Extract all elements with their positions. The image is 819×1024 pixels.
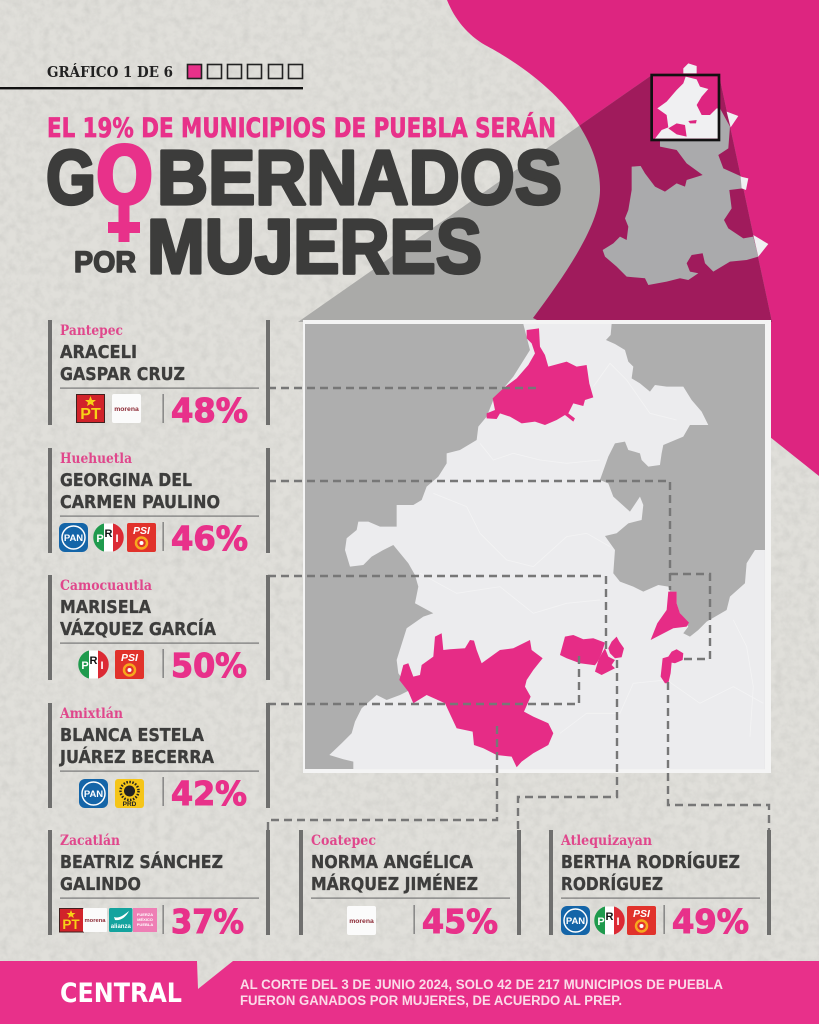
icon: Nueva Alianza logo: alianza bbox=[111, 924, 131, 930]
icon: PRI logo bbox=[78, 650, 109, 678]
icon: morena logo: morena bbox=[85, 918, 106, 924]
icon: PSI logo: PSI bbox=[121, 652, 139, 664]
icon: morena logo bbox=[112, 394, 141, 423]
municipality: Zacatlán bbox=[399, 633, 553, 767]
panel: Camocuautla: 50% bbox=[171, 646, 247, 685]
headline gobernados: BERNADOS bbox=[157, 135, 562, 221]
panel: Camocuautla: MARISELA bbox=[60, 597, 151, 618]
panel: Coatepec: NORMA ANGÉLICA bbox=[311, 851, 473, 873]
icon: PRI logo: P bbox=[81, 660, 89, 672]
municipality: Coatepec bbox=[595, 648, 615, 675]
panel: Pantepec: GASPAR CRUZ bbox=[60, 364, 185, 385]
subtitle: EL 19% DE MUNICIPIOS DE PUEBLA SERÁN bbox=[47, 112, 556, 144]
panel: Pantepec: Pantepec bbox=[60, 323, 123, 339]
panel: Coatepec: MÁRQUEZ JIMÉNEZ bbox=[311, 873, 478, 895]
icon: Fuerza por México logo: FUERZA bbox=[137, 912, 153, 917]
icon: PRI logo: R bbox=[606, 911, 614, 923]
logo: CENTRAL: CENTRAL bbox=[60, 978, 182, 1009]
icon: PAN logo: PAN bbox=[566, 916, 585, 927]
icon: Fuerza por México logo: PUEBLA bbox=[137, 922, 153, 927]
panel: Amixtlán: BLANCA ESTELA bbox=[60, 725, 204, 746]
panel: Amixtlán: JUÁREZ BECERRA bbox=[58, 746, 214, 768]
headline gobernados: O bbox=[95, 130, 154, 223]
icon: PAN logo: PAN bbox=[84, 789, 103, 800]
panel: Huehuetla bbox=[48, 448, 270, 558]
icon: Fuerza por México logo bbox=[133, 908, 157, 932]
panel: Pantepec: ARACELI bbox=[60, 342, 137, 363]
municipality: Huehuetla bbox=[651, 592, 689, 640]
municipality: Amixtlán bbox=[560, 635, 605, 665]
icon: PRI logo: R bbox=[90, 655, 98, 667]
state silhouette bbox=[603, 108, 758, 285]
icon: morena logo bbox=[83, 908, 107, 932]
panel: Camocuautla: VÁZQUEZ GARCÍA bbox=[60, 618, 216, 640]
icon: PT logo bbox=[60, 908, 84, 932]
panel: Amixtlán: Amixtlán bbox=[59, 706, 123, 722]
highlighted municipalities bbox=[399, 328, 689, 767]
icon: PAN logo bbox=[79, 779, 108, 808]
pink corner shape bbox=[447, 0, 819, 476]
faint municipal boundaries bbox=[420, 363, 763, 737]
panel: Huehuetla: GEORGINA DEL bbox=[60, 470, 192, 491]
icon: PSI logo bbox=[127, 523, 156, 552]
panel: Huehuetla: Huehuetla bbox=[60, 451, 132, 467]
icon: venus symbol stem bbox=[108, 200, 140, 242]
panel: Amixtlán bbox=[48, 703, 270, 813]
icon: PRI logo: I bbox=[100, 660, 104, 672]
white tips outside beam bbox=[683, 63, 768, 257]
icon: PRI logo bbox=[594, 906, 625, 934]
panel: Pantepec bbox=[48, 320, 270, 430]
panel: Amixtlán: 42% bbox=[171, 774, 247, 813]
panel: Coatepec: 45% bbox=[422, 902, 498, 941]
icon: Fuerza por México logo: MÉXICO bbox=[137, 917, 153, 922]
icon: PSI logo: PSI bbox=[133, 525, 151, 537]
icon: PAN logo bbox=[561, 906, 590, 935]
panel: Huehuetla: 46% bbox=[171, 519, 248, 558]
panel: Zacatlán: 37% bbox=[171, 902, 244, 941]
panel: Zacatlán bbox=[48, 830, 270, 941]
icon: PAN logo bbox=[59, 523, 88, 552]
footnote: FUERON GANADOS POR MUJERES, DE ACUERDO AL PREP. bbox=[240, 993, 622, 1008]
panel: Huehuetla: CARMEN PAULINO bbox=[60, 492, 220, 513]
icon: PRI logo: P bbox=[96, 533, 104, 545]
icon: PRI logo: I bbox=[115, 533, 119, 545]
chart counter: gráfico 1 de 6: GRÁFICO 1 DE 6 bbox=[47, 63, 173, 81]
icon: PSI logo bbox=[115, 650, 144, 679]
icon: PT logo: PT bbox=[80, 406, 101, 423]
headline gobernados: G bbox=[46, 135, 96, 221]
icon: PSI logo: PSI bbox=[633, 908, 651, 920]
footnote bbox=[240, 977, 723, 1008]
panel: Camocuautla bbox=[48, 575, 270, 685]
icon: PSI logo bbox=[627, 906, 656, 935]
locator map of Puebla bbox=[603, 63, 768, 285]
icon: PT logo: PT bbox=[62, 917, 80, 932]
icon: PRI logo: I bbox=[616, 916, 620, 928]
panel: Atlequizayan: RODRÍGUEZ bbox=[561, 873, 663, 895]
panel: Atlequizayan: 49% bbox=[672, 902, 749, 941]
icon: morena logo: morena bbox=[349, 918, 374, 925]
icon: morena logo: morena bbox=[114, 406, 139, 413]
panel: Coatepec bbox=[299, 830, 521, 941]
icon: PRI logo: P bbox=[597, 916, 605, 928]
headline gobernados bbox=[46, 130, 562, 223]
panel: Atlequizayan: BERTHA RODRÍGUEZ bbox=[561, 851, 740, 873]
panel: Camocuautla: Camocuautla bbox=[60, 578, 152, 594]
panel: Atlequizayan bbox=[549, 830, 771, 941]
panel: Coatepec: Coatepec bbox=[311, 833, 376, 849]
panel: Pantepec: 48% bbox=[171, 391, 248, 430]
icon: PT logo bbox=[76, 394, 104, 423]
municipality: Camocuautla bbox=[608, 637, 624, 658]
headline por mujeres: MUJERES bbox=[147, 204, 482, 290]
main zoomed map bbox=[303, 320, 771, 773]
icon: PRI logo bbox=[93, 524, 124, 552]
icon: PRD logo: PRD bbox=[123, 801, 137, 808]
municipality: Pantepec bbox=[487, 328, 593, 425]
icon: morena logo bbox=[347, 906, 376, 935]
icon: PRI logo: R bbox=[105, 528, 113, 540]
dashed leader lines bbox=[268, 388, 769, 830]
footer band bbox=[0, 961, 819, 1024]
icon: PRD logo bbox=[115, 779, 144, 808]
locator square bbox=[652, 75, 719, 140]
panel: Zacatlán: GALINDO bbox=[60, 874, 141, 895]
panel: Atlequizayan: Atlequizayan bbox=[560, 833, 652, 849]
panel: Zacatlán: Zacatlán bbox=[60, 833, 120, 849]
municipality: Atlequizayan bbox=[661, 649, 683, 683]
icon: Nueva Alianza logo bbox=[109, 908, 132, 932]
headline por mujeres: POR bbox=[74, 246, 136, 279]
title bbox=[46, 112, 562, 290]
light region: municipalities bbox=[329, 324, 765, 769]
icon: PAN logo: PAN bbox=[64, 533, 83, 544]
chart counter: gráfico 1 de 6 bbox=[0, 63, 303, 89]
footnote: AL CORTE DEL 3 DE JUNIO 2024, SOLO 42 DE 217 MUNICIPIOS DE PUEBLA bbox=[240, 977, 723, 992]
zoom beam from locator square to map bbox=[298, 75, 772, 322]
panel: Zacatlán: BEATRIZ SÁNCHEZ bbox=[60, 851, 223, 873]
